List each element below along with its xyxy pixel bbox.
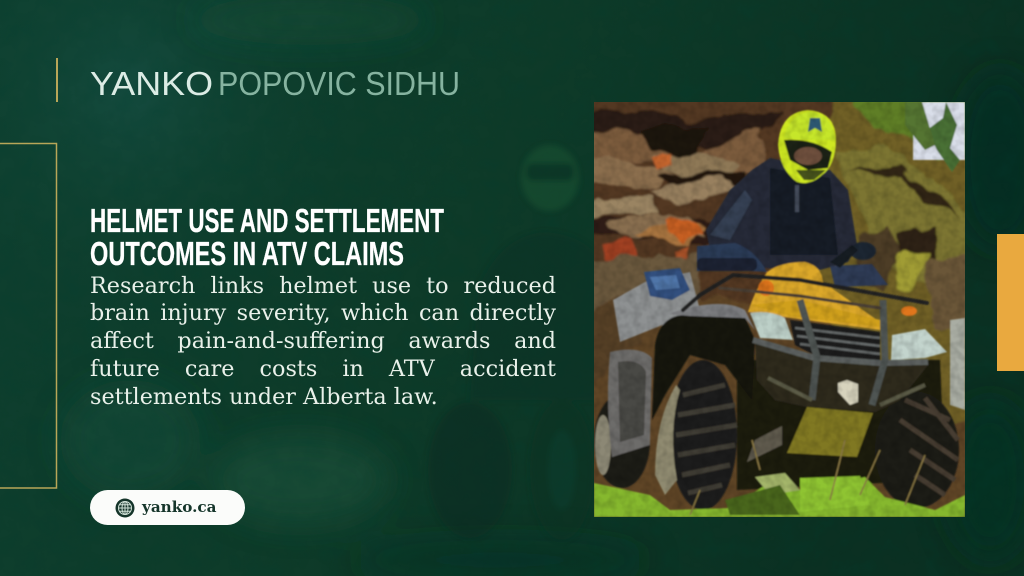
- rear wheel and fender: [594, 350, 652, 488]
- title: [90, 208, 444, 268]
- photo background: rock face: [594, 102, 965, 517]
- rider: neon helmet: [778, 110, 836, 183]
- photo background: sky and tree: [905, 102, 965, 410]
- photo grain: [594, 102, 965, 517]
- front-right tyre: [875, 392, 959, 508]
- front-left tyre: [655, 360, 737, 510]
- ATV yellow body: [748, 262, 917, 330]
- body text: Research links helmet use to reduced: [90, 272, 556, 298]
- ATV front rack: [683, 275, 927, 310]
- rider: jacket and arms: [706, 158, 857, 270]
- front fender and dark wheel arch: [652, 304, 755, 420]
- decorative gold frame on left: [0, 142, 58, 489]
- website pill: [90, 490, 245, 525]
- body text: [90, 272, 556, 410]
- logo divider line: [56, 58, 58, 102]
- logo: Yanko Popovic Sidhu: POPOVIC SIDHU: [218, 65, 460, 102]
- grass blades in front of wheels: [690, 440, 925, 515]
- icon: globe: [116, 498, 134, 518]
- orange accent bar: [997, 234, 1024, 371]
- body text: brain injury severity, which can directly: [90, 300, 556, 326]
- body text: settlements under Alberta law.: [90, 384, 438, 410]
- ATV front: grille, headlights, bumper and skid plate: [747, 300, 947, 462]
- undercarriage shadow: [737, 360, 945, 490]
- logo: Yanko Popovic Sidhu: YANKO: [90, 65, 213, 102]
- website pill: yanko.ca: [142, 498, 216, 516]
- photo: rider on yellow ATV: [594, 102, 965, 517]
- luggage bag: [613, 268, 700, 342]
- grass: [594, 473, 965, 517]
- body text: affect pain-and-suffering awards and: [90, 328, 556, 354]
- body text: future care costs in ATV accident: [90, 356, 556, 382]
- logo: Yanko Popovic Sidhu: [90, 65, 460, 102]
- handlebar guards and mirror: [697, 242, 888, 287]
